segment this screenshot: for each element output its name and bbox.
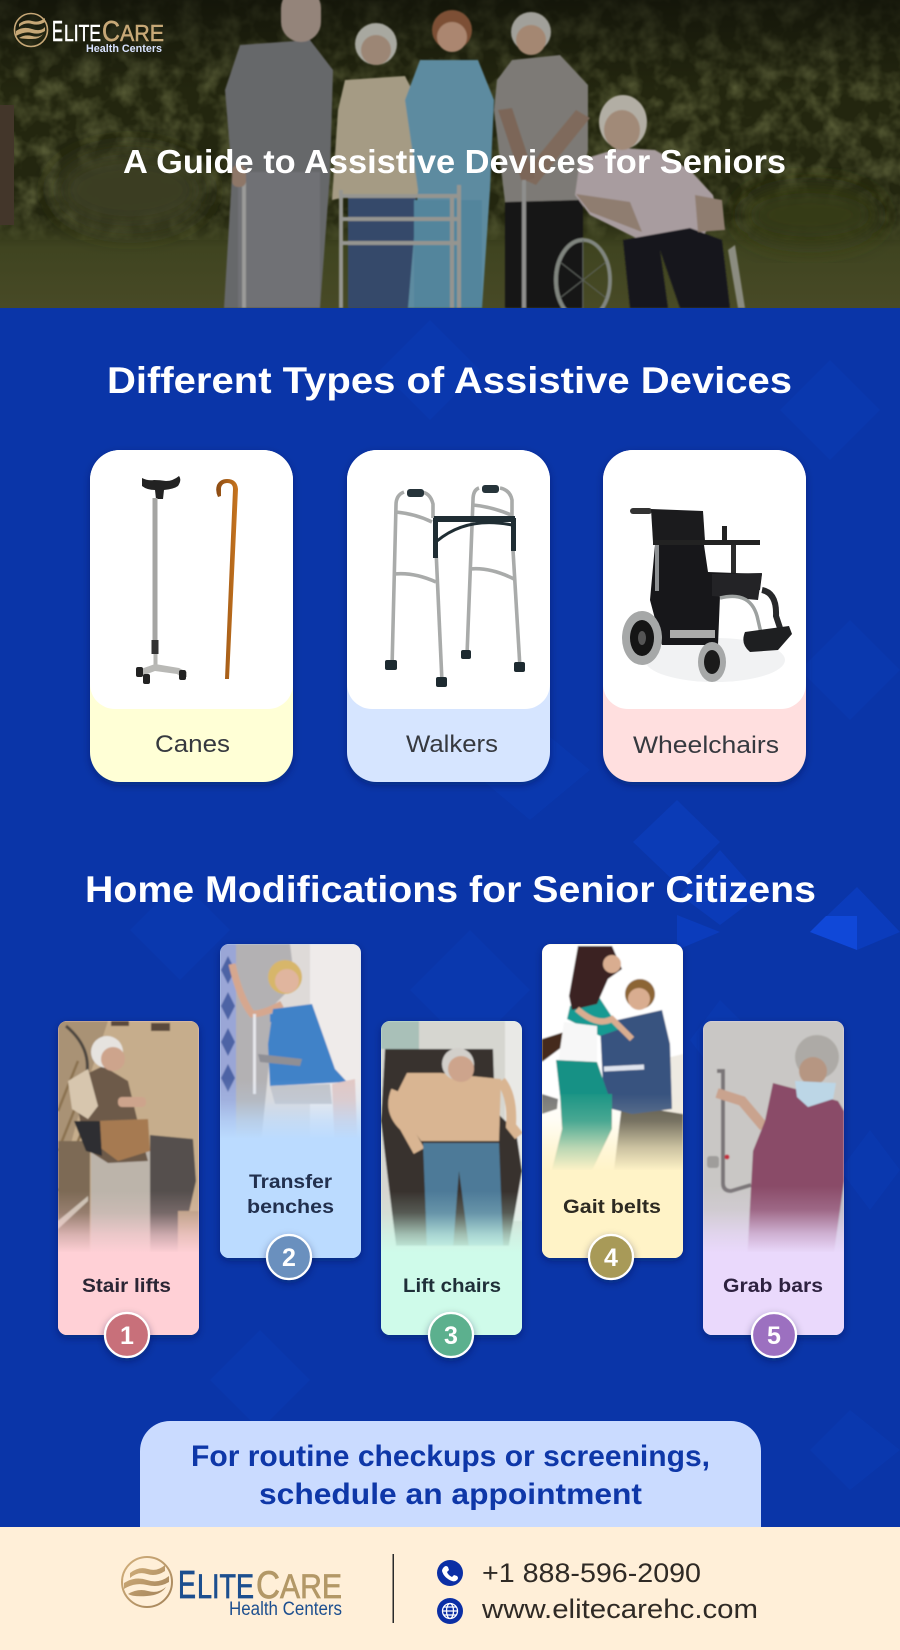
badge: 4: 4 [604, 1244, 618, 1272]
callout: schedule an appointment: schedule an appointment [259, 1478, 642, 1511]
icon: wooden cane [216, 479, 238, 679]
label: grab bars: Grab bars [723, 1275, 823, 1297]
heading: home modifications for senior citizens: Home Modifications for Senior Citizens [85, 869, 816, 910]
heading: different types of assistive devices: Different Types of Assistive Devices [107, 360, 792, 401]
logo: top left: Health Centers [86, 43, 162, 55]
contact: phone number: +1 888-596-2090 [482, 1558, 701, 1588]
label: gait belts: Gait belts [563, 1196, 661, 1218]
panel: grab bars [703, 1021, 844, 1357]
man with cane and beard [505, 198, 583, 308]
icon: phone [437, 1560, 463, 1586]
nurse [405, 60, 494, 308]
panel: lift chairs [381, 1021, 522, 1357]
hero photo: seniors with assistive devices [0, 0, 900, 320]
footer logo: C [256, 1564, 280, 1607]
callout: schedule an appointment: For routine checkups or screenings, [191, 1440, 710, 1473]
panel: walkers [347, 450, 550, 782]
badge: 1 [105, 1313, 149, 1357]
badge: 2 [267, 1235, 311, 1279]
panel: stair lifts [58, 1021, 199, 1357]
panel: canes [90, 450, 293, 782]
icon: power wheelchair [622, 508, 792, 682]
logo: top left: E [52, 16, 63, 48]
badge: 4 [589, 1235, 633, 1279]
logo: top left [14, 14, 164, 55]
badge: 3: 3 [444, 1322, 458, 1350]
badge: 1: 1 [120, 1322, 134, 1350]
label: stair lifts: Stair lifts [82, 1275, 171, 1297]
footer logo: E [178, 1564, 196, 1607]
woman with walker [348, 190, 416, 308]
panel: gait belts [542, 944, 683, 1279]
footer logo: Health Centers [229, 1599, 342, 1620]
badge: 5 [752, 1313, 796, 1357]
footer [0, 1527, 900, 1650]
label: transfer benches [247, 1171, 334, 1218]
badge: 2: 2 [282, 1244, 296, 1272]
icon: globe [437, 1598, 463, 1624]
badge: 5: 5 [767, 1322, 781, 1350]
label: walkers: Walkers [406, 731, 498, 758]
logo: top left: LITE [64, 20, 101, 46]
title: A Guide to Assistive Devices for Seniors [123, 143, 786, 180]
footer logo [122, 1557, 342, 1620]
badge: 3 [429, 1313, 473, 1357]
callout: schedule an appointment [140, 1421, 761, 1527]
walker frame [341, 185, 459, 308]
icon: quad cane [136, 476, 187, 684]
label: lift chairs: Lift chairs [403, 1275, 501, 1297]
label: wheelchairs: Wheelchairs [633, 732, 779, 759]
man with cane [224, 40, 333, 308]
contact: website: www.elitecarehc.com [481, 1594, 758, 1624]
label: canes: Canes [155, 731, 230, 758]
panel: wheelchairs [603, 450, 806, 782]
woman in wheelchair [556, 240, 610, 320]
logo: top left: ARE [120, 20, 164, 46]
icon: folding walker [385, 485, 525, 687]
label: transfer benches: Transfer [249, 1171, 332, 1193]
background: blue panel [0, 308, 900, 1527]
label: transfer benches: benches [247, 1196, 334, 1218]
logo: top left: C [102, 16, 120, 48]
panel: transfer benches [220, 944, 361, 1279]
footer logo: ARE [280, 1568, 342, 1606]
footer logo: LITE [197, 1568, 254, 1606]
